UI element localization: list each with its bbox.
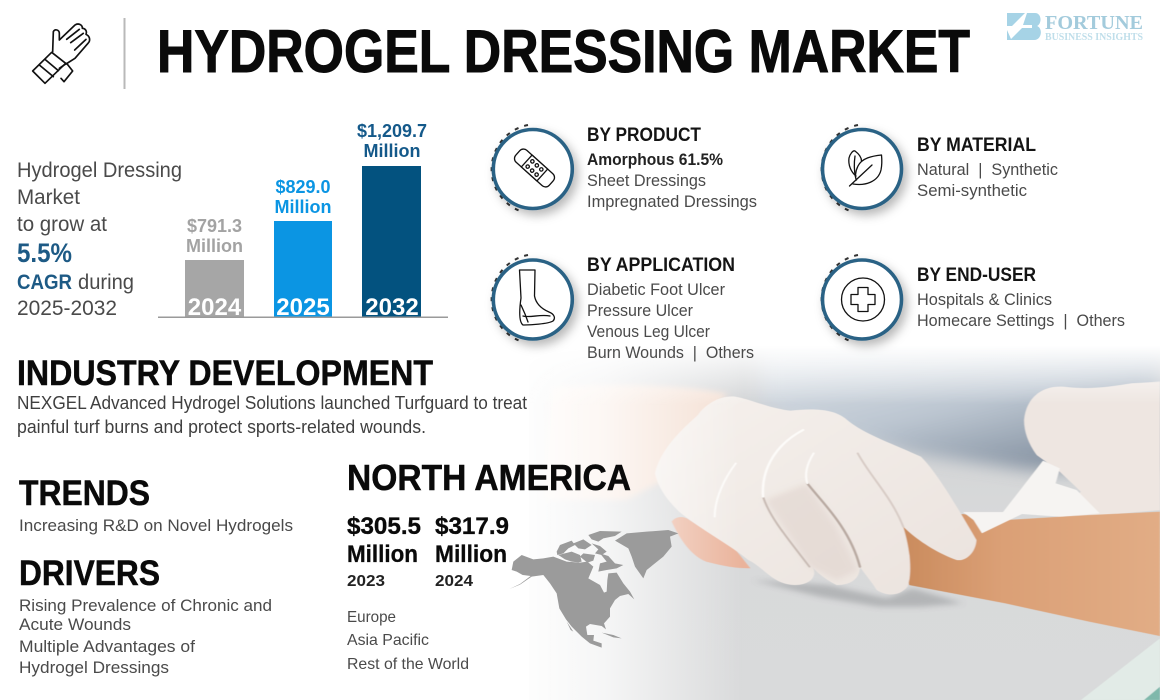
list: other regions [347, 609, 469, 673]
panel: trends: TRENDS [19, 474, 150, 513]
panel: drivers [19, 554, 272, 677]
panel: drivers: Multiple Advantages of [19, 637, 195, 656]
bar 2025: 2025 [276, 294, 330, 321]
panel: north america: NORTH AMERICA [347, 457, 631, 498]
text block: by product: Sheet Dressings [587, 171, 706, 190]
bar 2032: 2032 [365, 294, 419, 321]
text block: by application: Diabetic Foot Ulcer [587, 280, 725, 299]
text block: by application [587, 255, 754, 362]
list: other regions: Europe [347, 609, 396, 626]
bar 2032: $1,209.7 [357, 121, 427, 141]
text block: by product: BY PRODUCT [587, 125, 701, 146]
text block: by product: Amorphous 61.5% [587, 151, 723, 169]
stat: 2023 value: $305.5 [347, 513, 421, 540]
text block: growth summary: 5.5% [17, 238, 72, 268]
text block: by end-user [917, 265, 1125, 330]
icon: medical cross badge [822, 255, 902, 341]
left fade to white [529, 354, 728, 700]
peeled dressing on forearm [963, 461, 1100, 533]
text block: by end-user: BY END-USER [917, 265, 1036, 286]
bar 2024: 2024 [188, 294, 242, 321]
title: HYDROGEL DRESSING MARKET [157, 18, 970, 85]
panel: drivers: Acute Wounds [19, 615, 131, 634]
panel: industry development: NEXGEL Advanced Hydrogel Solutions launched Turfguard to treat [17, 393, 527, 413]
panel: trends [19, 474, 293, 535]
header divider [124, 18, 126, 89]
list: other regions: Rest of the World [347, 656, 469, 673]
patient hand under glove [672, 517, 750, 568]
panel: industry development [17, 354, 527, 437]
stat: 2024 value: $317.9 [435, 513, 509, 540]
panel: drivers: DRIVERS [19, 554, 160, 593]
icon: leaves badge [822, 125, 902, 211]
text block: by material [917, 135, 1058, 200]
stat: 2023 value: Million [347, 541, 418, 568]
bar 2024: $791.3 [187, 216, 242, 236]
text block: by material: Semi-synthetic [917, 181, 1027, 200]
text block: by application: Burn Wounds | Others [587, 343, 754, 362]
bar 2025: Million [274, 197, 332, 217]
text block: by application: Venous Leg Ulcer [587, 322, 710, 341]
blurred wall behind the hands [773, 367, 1160, 481]
panel: drivers: Rising Prevalence of Chronic and [19, 596, 272, 615]
bar 2032 [357, 121, 427, 321]
list: other regions: Asia Pacific [347, 632, 429, 649]
glove shading [768, 486, 854, 578]
main glove [655, 396, 976, 594]
bar 2025 [274, 177, 332, 321]
text block: by application: BY APPLICATION [587, 255, 735, 276]
panel: industry development: INDUSTRY DEVELOPMENT [17, 354, 433, 393]
text block: by material: Natural | Synthetic [917, 160, 1058, 179]
text block: growth summary: during [78, 271, 134, 294]
stat: 2024 value: 2024 [435, 573, 473, 590]
bar chart: market size [158, 121, 448, 321]
logo: Fortune Business Insights: FORTUNE [1045, 12, 1143, 34]
panel: drivers: Hydrogel Dressings [19, 658, 169, 677]
text block: growth summary: to grow at [17, 213, 107, 236]
bar 2024 [185, 216, 244, 321]
stat: 2023 value: 2023 [347, 573, 385, 590]
bar 2032: Million [364, 141, 420, 161]
bar 2025: $829.0 [275, 177, 331, 197]
stat: 2024 value: Million [435, 541, 507, 568]
stat: 2024 value [435, 513, 509, 590]
text block: by end-user: Homecare Settings | Others [917, 311, 1125, 330]
tray corner [1081, 638, 1160, 700]
text block: growth summary [17, 159, 182, 320]
panel: north america [347, 457, 631, 673]
text block: growth summary: Market [17, 186, 80, 209]
text block: by product: Impregnated Dressings [587, 192, 757, 211]
text block: growth summary: Hydrogel Dressing [17, 159, 182, 182]
text block: by material: BY MATERIAL [917, 135, 1036, 156]
logo: Fortune Business Insights: BUSINESS INSIGHTS [1045, 32, 1143, 43]
panel: trends: Increasing R&D on Novel Hydrogels [19, 516, 293, 535]
text block: growth summary: CAGR [17, 271, 72, 294]
map: North America [509, 530, 678, 648]
icon: foot badge [492, 255, 572, 341]
stat: 2023 value [347, 513, 421, 590]
upper right glove shape [1024, 382, 1160, 517]
text block: by end-user: Hospitals & Clinics [917, 290, 1052, 309]
text block: growth summary: 2025-2032 [17, 297, 117, 320]
icon: glove header icon [33, 24, 90, 83]
glove folds [715, 430, 903, 567]
text block: by product [587, 125, 757, 211]
top fade to white [571, 346, 1160, 398]
background photo: gloved hands dressing an arm [570, 354, 1160, 700]
shadow under fingers [753, 580, 963, 607]
bar 2024: Million [186, 236, 243, 256]
logo: Fortune Business Insights [1007, 12, 1143, 43]
panel: industry development: painful turf burns and protect sports-related wounds. [17, 417, 426, 437]
icon: bandage badge [492, 125, 572, 211]
text block: by application: Pressure Ulcer [587, 301, 693, 320]
faded forearm behind glove [600, 386, 727, 498]
forearm [896, 512, 1160, 636]
